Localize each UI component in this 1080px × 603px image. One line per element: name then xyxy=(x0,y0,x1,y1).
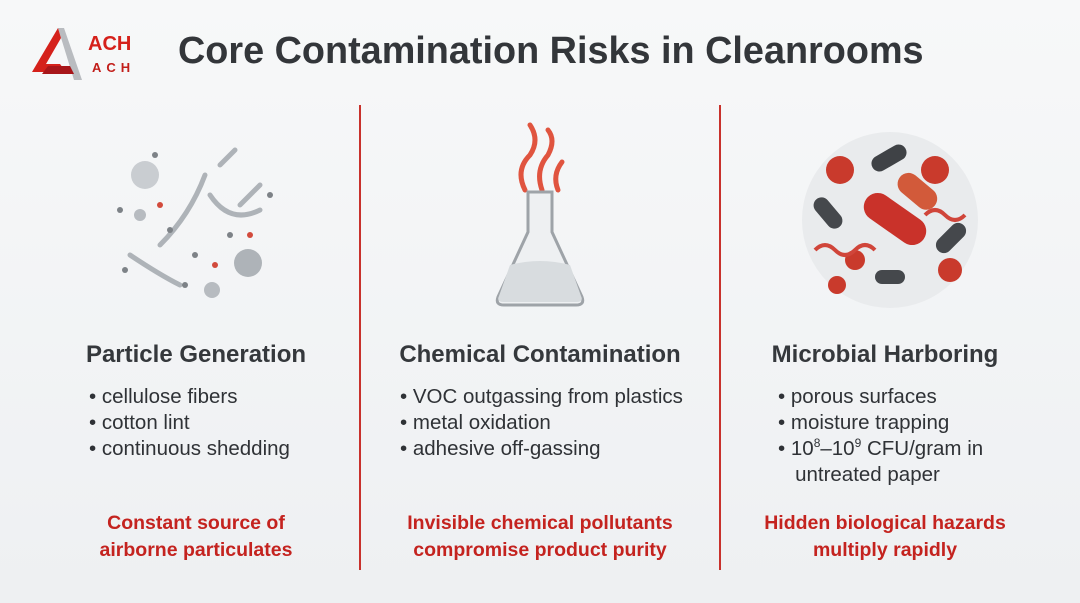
caption: compromise product purity xyxy=(413,539,667,561)
bullets: cotton lint xyxy=(102,411,190,434)
logo: ACH xyxy=(88,33,131,55)
heading: Particle Generation xyxy=(86,341,306,368)
bullets xyxy=(400,385,683,460)
column: chemical xyxy=(399,341,683,561)
caption: Invisible chemical pollutants xyxy=(407,512,673,534)
bullets: adhesive off-gassing xyxy=(413,437,601,460)
bullets: metal oxidation xyxy=(413,411,551,434)
heading: Microbial Harboring xyxy=(772,341,998,368)
caption xyxy=(764,512,1006,561)
heading: Chemical Contamination xyxy=(399,341,681,368)
caption: airborne particulates xyxy=(100,539,292,561)
bullets xyxy=(778,385,983,486)
icon: particles xyxy=(117,148,273,298)
bullets: cellulose fibers xyxy=(102,385,237,408)
bullets: porous surfaces xyxy=(791,385,937,408)
caption: multiply rapidly xyxy=(813,539,957,561)
icon: flask xyxy=(496,122,584,306)
column: particle xyxy=(86,341,306,561)
title: Core Contamination Risks in Cleanrooms xyxy=(178,30,924,72)
bullets xyxy=(90,385,290,460)
caption: Constant source of xyxy=(107,512,285,534)
bullets: continuous shedding xyxy=(102,437,290,460)
caption: Hidden biological hazards xyxy=(764,512,1006,534)
bullets: 108–109 CFU/gram in xyxy=(791,436,983,460)
bullets: untreated paper xyxy=(795,463,940,486)
icon: microbes xyxy=(802,132,978,308)
bullets: VOC outgassing from plastics xyxy=(413,385,683,408)
caption xyxy=(100,512,292,561)
bullets: moisture trapping xyxy=(791,411,949,434)
logo xyxy=(32,28,135,80)
logo: ACH xyxy=(92,60,135,75)
column: microbial xyxy=(764,341,1006,561)
caption xyxy=(407,512,673,561)
